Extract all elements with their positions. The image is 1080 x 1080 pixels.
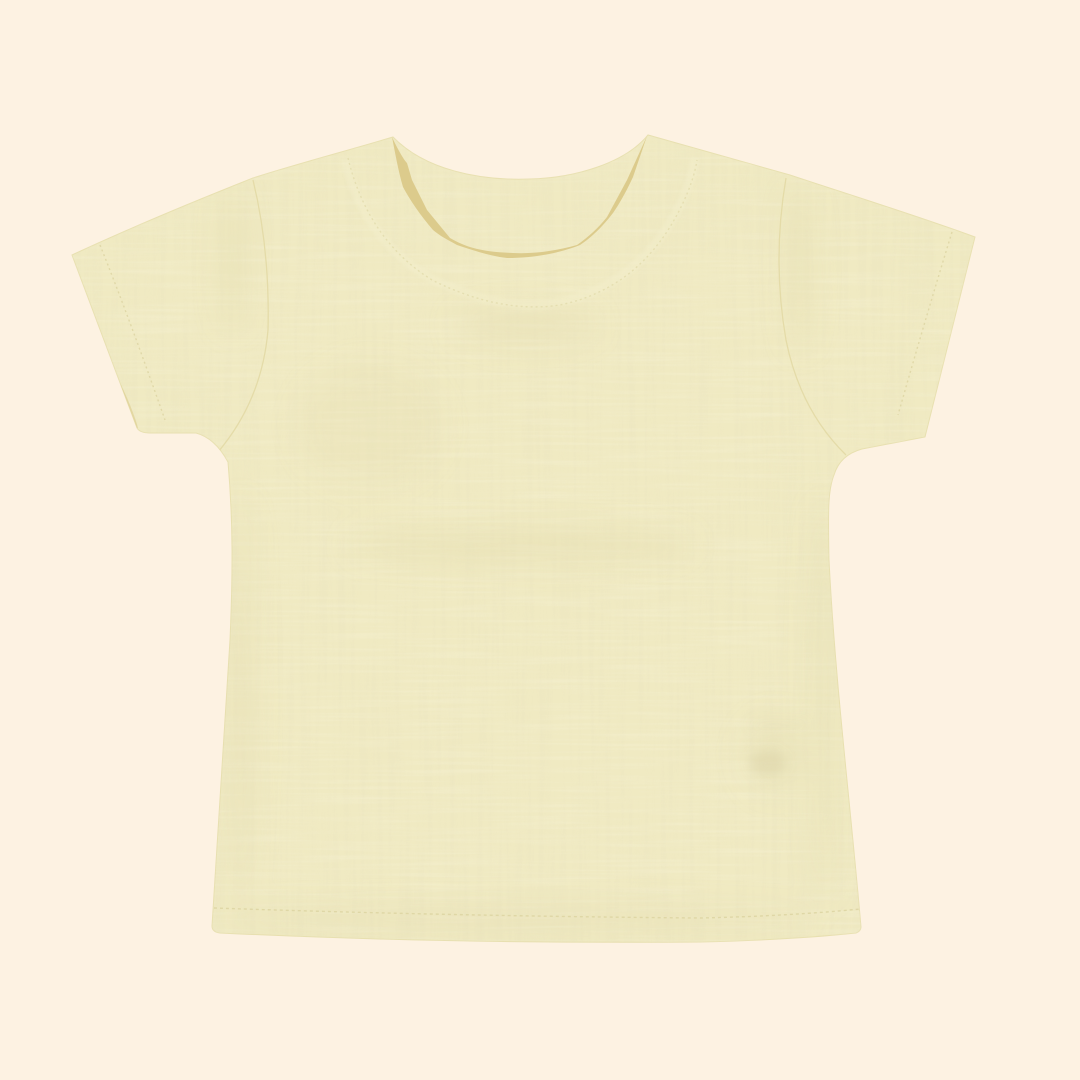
right sleeve hem stitching [898,232,952,415]
left sleeve edge fold [120,385,137,428]
collar shadow crescent [392,136,647,258]
faint print ghost [753,756,781,774]
left sleeve seam [218,180,268,452]
t-shirt [60,130,990,950]
shirt body and sleeves [72,135,975,942]
panel: cream background [72,134,976,943]
left sleeve hem stitching [100,245,165,420]
bottom hem stitching [214,908,860,918]
collar stitching [348,158,697,307]
right sleeve seam [779,178,846,455]
fabric weave texture [112,163,963,942]
soft fabric shading [498,546,561,551]
collar rib band [345,158,695,304]
